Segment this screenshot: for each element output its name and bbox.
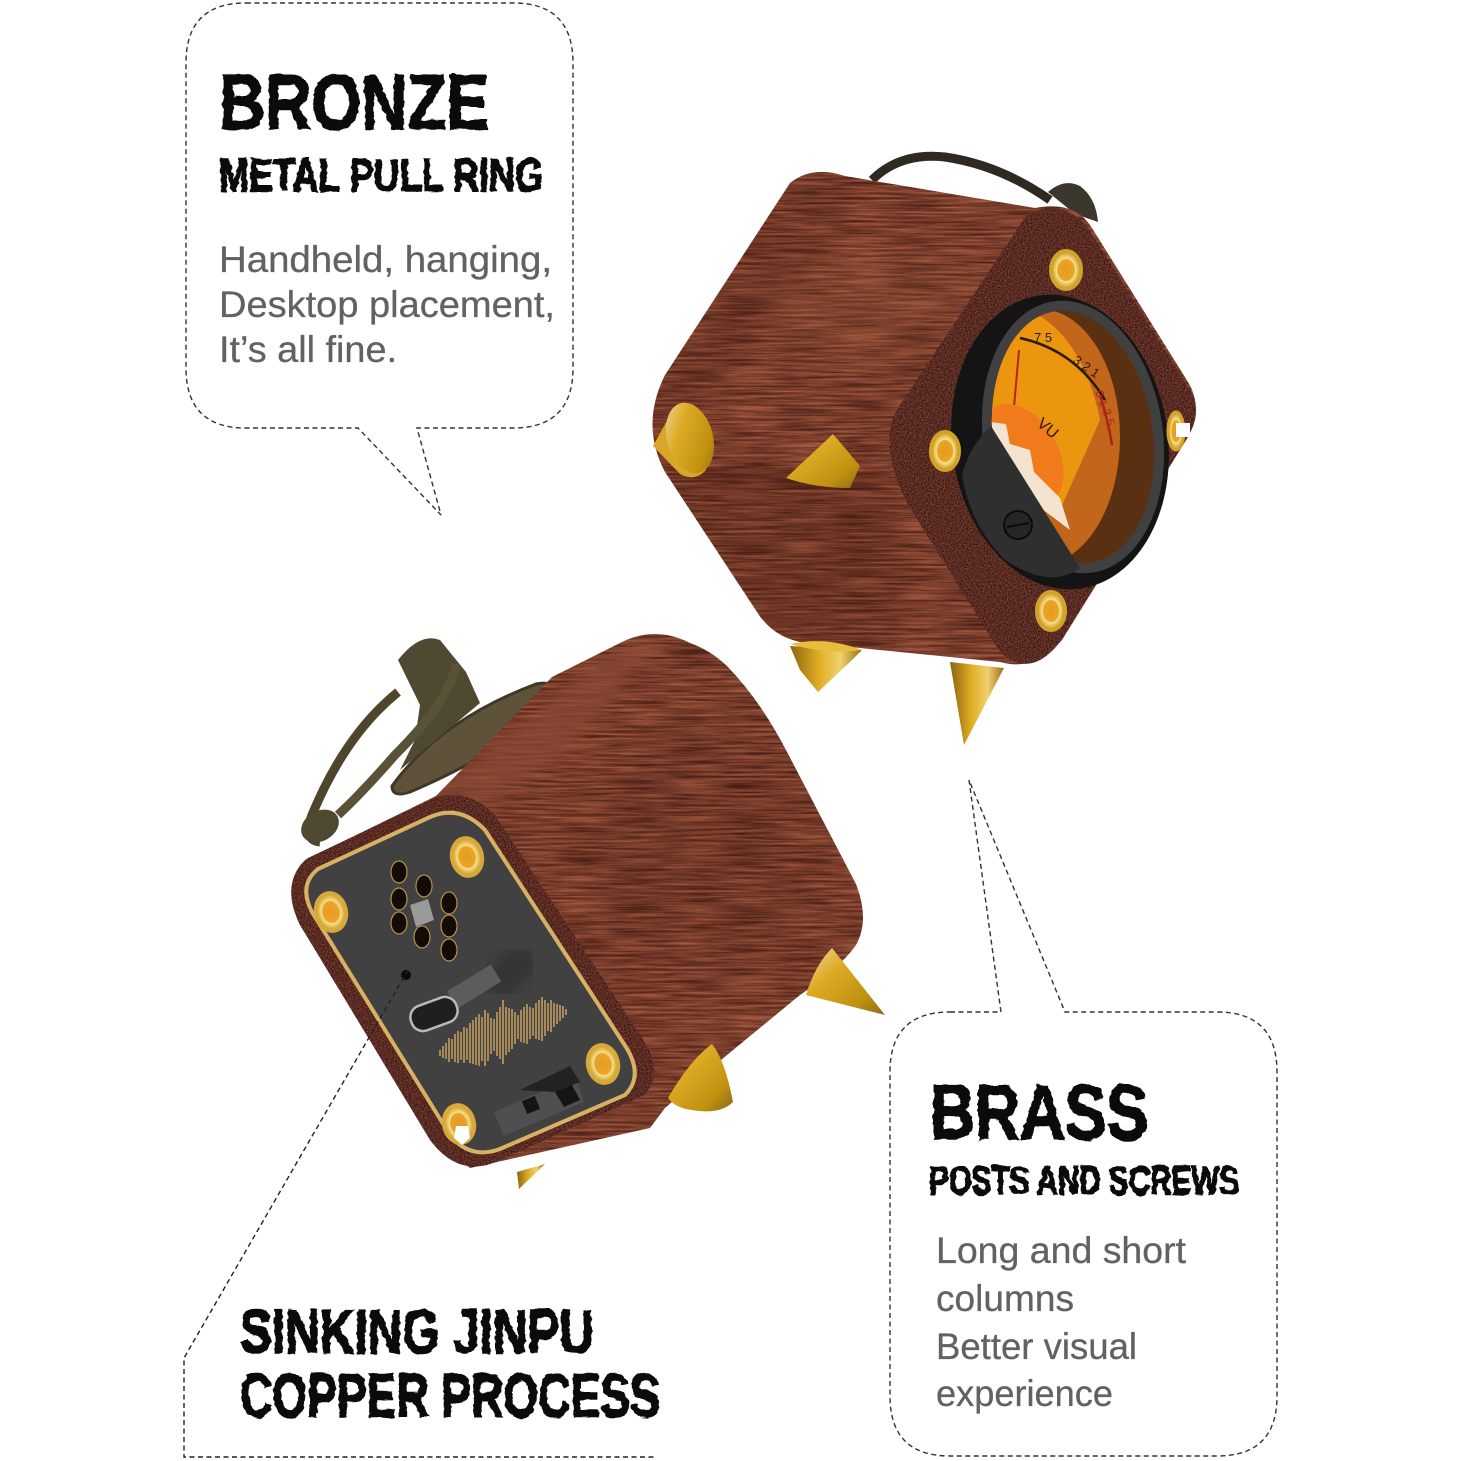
text block: brass description: Long and short: [936, 1230, 1187, 1271]
icon: pull ring cable: [872, 156, 1098, 222]
heading: bronze: [219, 58, 543, 201]
VU meter: 0 1 3 5: [1092, 388, 1118, 428]
icon: USB-C port: [407, 953, 529, 1034]
icon: brass screws: [312, 835, 622, 1146]
heading: sinking jinpu copper process: [240, 1298, 660, 1431]
icon: brass cones: [517, 948, 885, 1189]
heading: bronze: BRONZE: [219, 58, 489, 146]
heading: sinking jinpu copper process: COPPER PROCESS: [240, 1362, 660, 1431]
wood body: [280, 625, 880, 1185]
icon: bronze pull ring: [295, 638, 552, 849]
text block: bronze description: It’s all fine.: [219, 329, 397, 370]
icon: brass cones: [653, 397, 1004, 745]
text block: brass description: columns: [936, 1278, 1074, 1319]
VU meter: VU: [1033, 415, 1061, 442]
device: top view with VU meter: [640, 156, 1210, 745]
VU meter: 3 2 1: [1070, 352, 1103, 381]
text block: brass description: Better visual: [936, 1326, 1137, 1367]
text block: brass description: experience: [936, 1373, 1113, 1414]
heading: brass: [929, 1068, 1239, 1203]
gold trim and dark panel: [306, 813, 635, 1152]
icon: brass screws: [931, 251, 1190, 630]
speech bubble: brass callout: [890, 780, 1277, 1456]
icon: slide switch: [494, 1066, 584, 1136]
text block: bronze description: Handheld, hanging,: [219, 239, 552, 280]
text block: brass description: [936, 1230, 1187, 1414]
icon: sound waveform: [440, 997, 566, 1066]
icon: speaker holes: [391, 861, 457, 961]
speech bubble: bronze callout: [186, 3, 573, 515]
icon: pinhole: [401, 970, 411, 980]
VU meter: 7 5: [1034, 330, 1052, 345]
text block: bronze description: Desktop placement,: [219, 284, 555, 325]
face plate: [889, 208, 1196, 664]
VU meter: [951, 294, 1169, 590]
heading: brass: BRASS: [930, 1068, 1148, 1156]
callout leader: copper process: [184, 970, 655, 1457]
heading: brass: POSTS AND SCREWS: [929, 1159, 1239, 1203]
text block: bronze description: [219, 239, 555, 370]
heading: sinking jinpu copper process: SINKING JINPU: [240, 1298, 594, 1367]
back plate: [292, 795, 654, 1166]
device: back view with USB port: [280, 625, 885, 1189]
wood body: [640, 160, 1210, 680]
heading: bronze: METAL PULL RING: [219, 149, 543, 201]
